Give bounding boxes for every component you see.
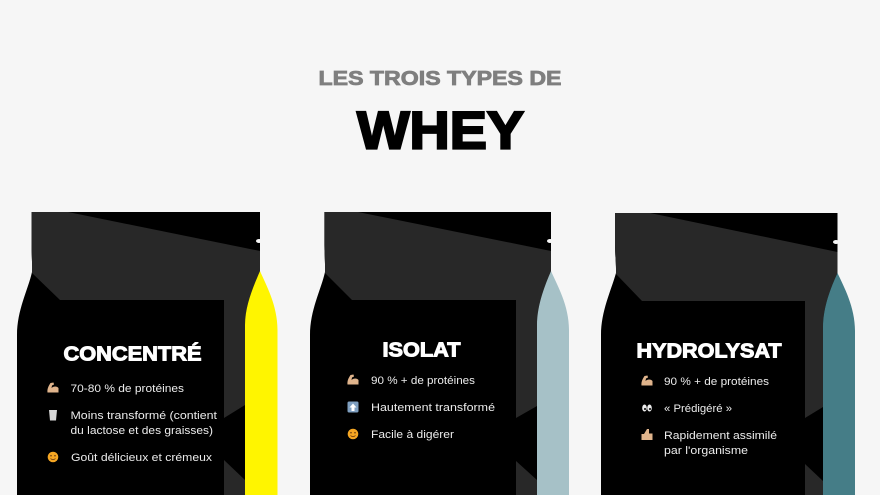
icon: flexed arm	[47, 382, 58, 392]
bag body	[310, 212, 551, 495]
icon: eyes	[642, 404, 652, 412]
benefit text continued: par l'organisme	[664, 445, 748, 457]
panel: hydrolysat	[601, 213, 855, 495]
bag shading	[615, 213, 838, 495]
heading: HYDROLYSAT	[636, 340, 782, 362]
bag notch	[256, 239, 262, 243]
panel: concentré	[17, 212, 278, 495]
benefit text: Hautement transformé	[371, 402, 495, 414]
pale blue side gusset	[537, 271, 569, 495]
benefit text: Rapidement assimilé	[664, 430, 777, 442]
heading: CONCENTRÉ	[64, 342, 202, 366]
benefit text: Facile à digérer	[371, 429, 454, 441]
benefit text continued: du lactose et des graisses)	[70, 425, 213, 437]
teal side gusset	[823, 273, 855, 495]
icon: flexed arm	[347, 374, 358, 384]
icon: up arrow	[348, 402, 358, 412]
bag notch	[547, 239, 553, 243]
heading: ISOLAT	[382, 338, 461, 362]
panel: isolat	[310, 212, 569, 495]
benefit text: Goût délicieux et crémeux	[71, 452, 213, 464]
bag shading	[324, 212, 551, 495]
bag shading	[32, 212, 260, 495]
benefit text: 90 % + de protéines	[371, 375, 476, 387]
title	[318, 67, 562, 160]
title line: whey: WHEY	[357, 102, 524, 160]
yellow side gusset	[245, 271, 278, 495]
benefit text: 90 % + de protéines	[664, 376, 770, 388]
benefit text: « Prédigéré »	[664, 403, 732, 415]
icon: smiling face	[348, 429, 358, 439]
bag body	[601, 213, 838, 495]
icon: yum face	[48, 452, 58, 462]
bag notch	[833, 240, 839, 244]
icon: flexed arm	[641, 376, 652, 386]
title line: les trois types de: LES TROIS TYPES DE	[318, 67, 562, 90]
benefit text: 70-80 % de protéines	[70, 383, 185, 395]
bag body	[17, 212, 260, 495]
icon: thumbs up	[642, 429, 652, 440]
benefit text: Moins transformé (contient	[70, 410, 217, 422]
icon: glass of milk	[49, 410, 57, 420]
